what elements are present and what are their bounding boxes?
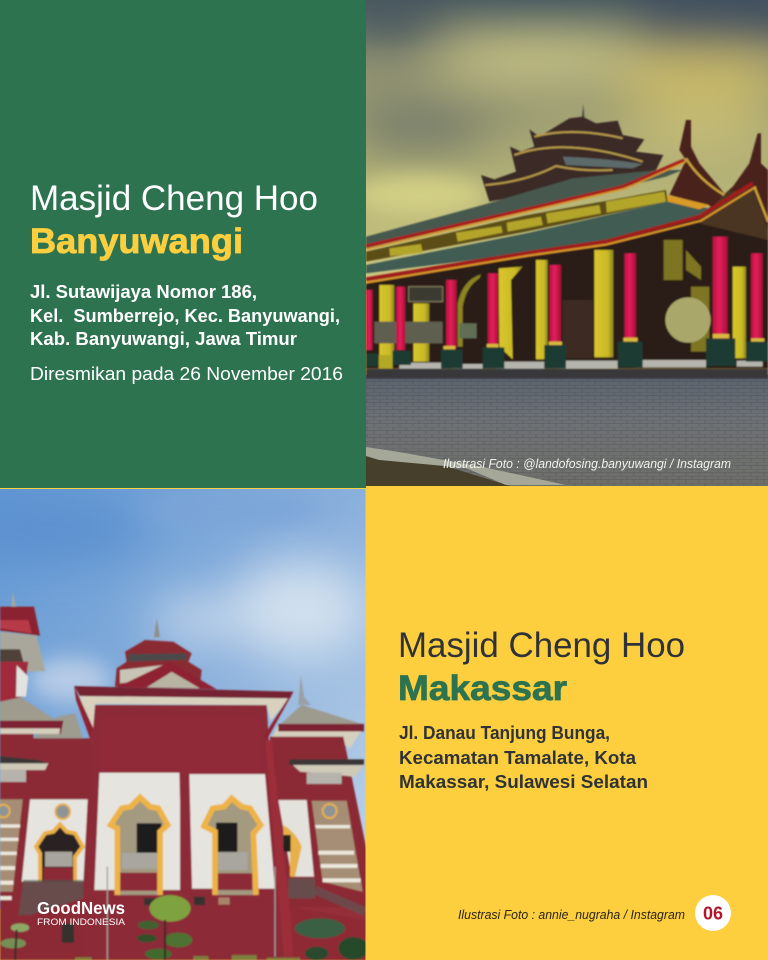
signboard — [409, 287, 443, 302]
vegetation strip — [366, 456, 510, 486]
photo: Masjid Cheng Hoo Banyuwangi — [340, 0, 768, 486]
logo: GoodNews from Indonesia: GoodNews — [37, 898, 125, 918]
right gables — [699, 187, 768, 240]
pagoda tiers — [481, 103, 663, 202]
text block: address: Kel. Sumberrejo, Kec. Banyuwangi, — [30, 306, 340, 326]
yellow columns — [379, 250, 746, 362]
logo: GoodNews from Indonesia: FROM INDONESIA — [37, 917, 125, 927]
main wall — [83, 705, 282, 960]
text block: address: Jl. Sutawijaya Nomor 186, — [30, 282, 257, 302]
heading: Banyuwangi: Banyuwangi — [30, 222, 243, 261]
page number badge: 06 — [703, 904, 723, 924]
page number badge — [695, 895, 731, 931]
text block: address — [30, 282, 340, 349]
left wing — [0, 697, 93, 960]
left tower — [0, 592, 45, 702]
roof slab — [74, 686, 295, 957]
yellow frieze — [366, 190, 668, 262]
text block: address: Makassar, Sulawesi Selatan — [399, 772, 648, 792]
lower roof — [366, 202, 709, 273]
panel: yellow Makassar info — [398, 626, 731, 931]
central pilaster — [179, 808, 184, 892]
heading: Masjid Cheng Hoo: Masjid Cheng Hoo — [30, 179, 318, 218]
building — [366, 103, 768, 379]
flowers — [75, 955, 300, 960]
text block: address: Kecamatan Tamalate, Kota — [399, 748, 637, 768]
arched window A — [111, 797, 168, 895]
basement vents — [62, 897, 205, 943]
building interior — [366, 207, 768, 368]
white wall panels — [94, 773, 275, 890]
steps — [399, 360, 763, 369]
upper roof — [366, 170, 683, 248]
caption: photo credit top: Ilustrasi Foto : @landofosing.banyuwangi / Instagram — [443, 457, 731, 471]
heading: Masjid Cheng Hoo: Masjid Cheng Hoo — [398, 626, 685, 665]
sky — [340, 0, 768, 290]
text block: inauguration date: Diresmikan pada 26 November 2016 — [30, 364, 343, 384]
central pagoda — [115, 618, 217, 689]
text block: address: Jl. Danau Tanjung Bunga, — [399, 723, 610, 743]
gold base post — [377, 354, 394, 370]
text block: address: Kab. Banyuwangi, Jawa Timur — [30, 329, 297, 349]
column bases — [366, 338, 768, 368]
arched window B — [204, 798, 261, 895]
ground: paving — [366, 375, 768, 486]
stair rail right — [290, 907, 365, 960]
interior lit windows — [374, 322, 443, 343]
far right spire — [298, 675, 311, 705]
sky — [0, 489, 370, 909]
text block: address — [399, 723, 648, 792]
gong — [665, 297, 711, 343]
heading: Makassar: Makassar — [398, 669, 567, 708]
bonsai trees — [1, 895, 368, 960]
right wing — [270, 705, 367, 960]
photo: Masjid Cheng Hoo Makassar — [0, 489, 370, 960]
caption: photo credit bottom: Ilustrasi Foto : annie_nugraha / Instagram — [458, 908, 685, 922]
logo: GoodNews from Indonesia — [38, 901, 125, 925]
red columns — [366, 237, 763, 350]
panel: green Banyuwangi info — [0, 0, 366, 488]
curb — [366, 447, 566, 485]
building — [0, 592, 368, 960]
lamp posts — [107, 867, 275, 960]
